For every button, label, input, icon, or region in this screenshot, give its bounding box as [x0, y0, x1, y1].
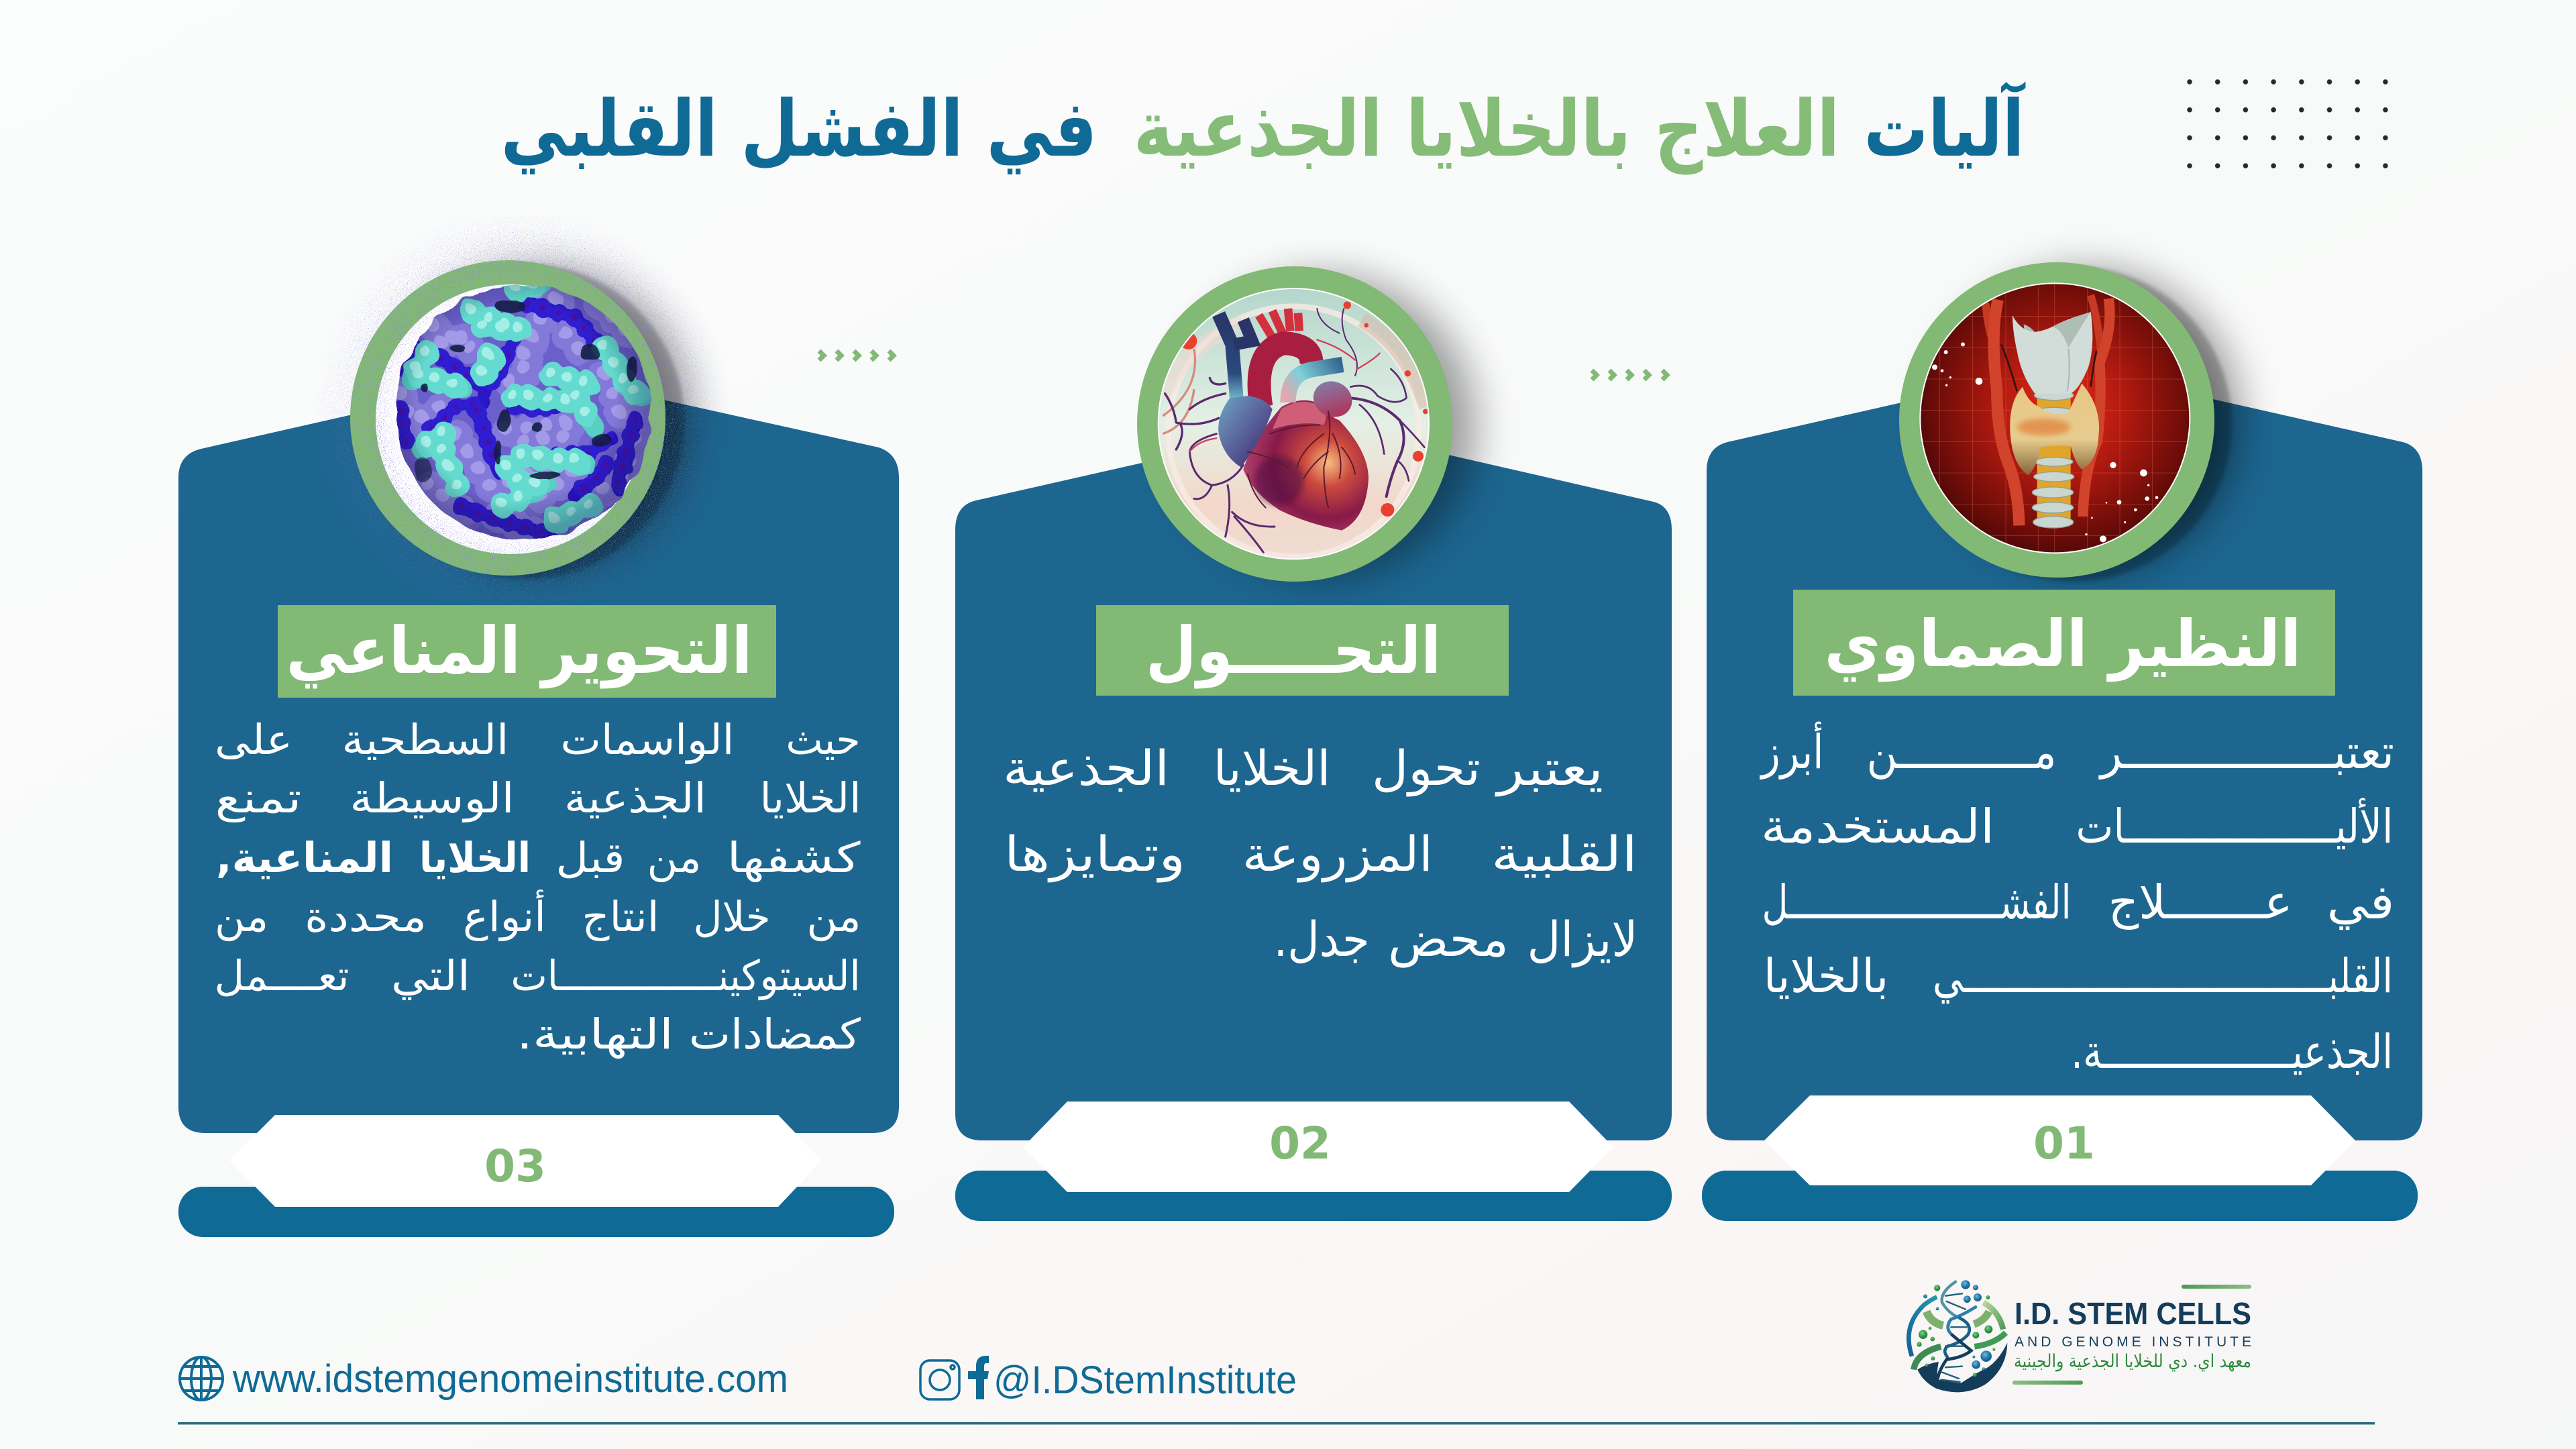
body text 03: أنواع — [463, 890, 546, 941]
body text 03: التهابية. — [517, 1010, 674, 1059]
icon: instagram — [920, 1360, 959, 1399]
body text 03: قبل — [555, 833, 625, 882]
body text 02: لايزال — [1527, 911, 1638, 968]
body text 03: الخلايا — [419, 833, 531, 882]
image circle: immune cell — [315, 215, 731, 631]
heading 03: التحوير المناعي — [286, 613, 753, 689]
body text 03: التي — [391, 951, 470, 1000]
number tab 03 — [229, 1115, 822, 1207]
title: في الفشل القلبي — [500, 84, 1097, 174]
card background 02 — [955, 424, 1672, 1140]
body text 01: القلبـــــــــــــــــــــــــــــــــي — [1933, 949, 2393, 1004]
body text 03: من — [215, 892, 268, 941]
arrows 03 — [819, 351, 894, 360]
body text 02 — [1003, 740, 1638, 968]
body text 03: كشفها — [727, 833, 861, 883]
body text 03: الخلايا — [759, 773, 861, 822]
coronaries — [1248, 411, 1355, 508]
body text 02: تحول — [1372, 740, 1481, 797]
logo — [1909, 1280, 2251, 1392]
title — [500, 81, 2026, 174]
icon: globe — [180, 1357, 223, 1400]
arteries — [1986, 295, 2110, 525]
body text 03: حيث — [786, 715, 860, 764]
footer: website: www.idstemgenomeinstitute.com — [232, 1357, 788, 1401]
body text 03: السطحية — [342, 715, 508, 764]
heading 02 — [1096, 605, 1509, 696]
logo: AND GENOME INSTITUTE — [2015, 1334, 2251, 1350]
image circle: heart — [1137, 266, 1476, 582]
body text 03 — [215, 715, 861, 1059]
body text 02: محض — [1388, 911, 1509, 968]
body text 01: تعتبــــــــــــــــر — [2098, 724, 2394, 780]
number tab 02 — [1023, 1102, 1613, 1192]
sparkles — [1932, 342, 2158, 542]
body text 03: الجذعية — [564, 773, 706, 822]
body text 03: على — [215, 715, 292, 764]
body text 03: كمضادات — [689, 1010, 861, 1059]
body text 03: المناعية, — [216, 833, 393, 882]
body text 03: تمنع — [215, 773, 302, 822]
arrows 02 — [1592, 370, 1667, 380]
card background 01 — [1707, 366, 2422, 1140]
body text 03: من — [806, 892, 861, 941]
body text 03: الواسمات — [561, 715, 734, 764]
heading 01: النظير الصماوي — [1825, 606, 2301, 682]
great vessels — [1219, 309, 1311, 407]
body text 03: الوسيطة — [350, 773, 514, 822]
emblem — [1909, 1280, 2007, 1392]
icon: facebook — [968, 1356, 989, 1399]
body text 01: المستخدمة — [1761, 799, 1994, 854]
bottom bar 02 — [955, 1171, 1672, 1221]
body text 01: الفشــــــــــــــــــــل — [1762, 875, 2072, 930]
ventricles — [1243, 400, 1368, 531]
body text 02: الخلايا — [1213, 740, 1331, 796]
brand text: I.D. STEM CELLS — [2015, 1296, 2251, 1331]
cartilage — [2024, 312, 2091, 349]
panel: 01 paracrine — [1702, 262, 2422, 1221]
dot grid decoration — [2176, 68, 2400, 180]
body text 01: أبرز — [1760, 721, 1823, 780]
veins — [1165, 309, 1424, 552]
body text 02: وتمايزها — [1004, 826, 1185, 883]
body text 02: الجذعية — [1003, 740, 1169, 796]
body text 01: في — [2326, 875, 2395, 930]
number tab 03: 03 — [484, 1140, 546, 1192]
bottom bar 03 — [178, 1187, 894, 1237]
body text 03: السيتوكينــــــــــــــات — [511, 951, 860, 1000]
card background 03 — [178, 372, 899, 1133]
heading 01 — [1793, 590, 2335, 696]
body text 01: بالخلايا — [1763, 949, 1889, 1004]
number tab 02: 02 — [1269, 1118, 1331, 1169]
panel: 02 differentiation — [955, 266, 1672, 1221]
number tab 01: 01 — [2033, 1118, 2095, 1169]
heading 02: التحـــــول — [1146, 613, 1441, 689]
panel: 03 immune modulation — [178, 215, 899, 1237]
body text 03: محددة — [305, 892, 427, 941]
body text 03: انتاج — [582, 892, 659, 941]
body text 03: من — [647, 833, 702, 882]
body text 01: الأليــــــــــــــــــات — [2076, 798, 2394, 854]
logo: معهد اي. دي للخلايا الجذعية والجينية — [2014, 1351, 2251, 1372]
body text 01: الجذعيـــــــــــــــــة. — [2071, 1024, 2393, 1079]
title: آليات — [1864, 81, 2026, 174]
body text 01: مـــــــــــن — [1866, 724, 2057, 780]
footer: social handle: @I.DStemInstitute — [994, 1358, 1297, 1402]
title: العلاج بالخلايا الجذعية — [1134, 84, 1839, 174]
body text 03: خلال — [694, 892, 770, 941]
body text 03: تعــــمل — [215, 951, 349, 1000]
thyroid gland — [2010, 384, 2099, 475]
body text 02: المزروعة — [1242, 826, 1433, 883]
body text 01: عـــــــلاج — [2108, 875, 2293, 930]
body text 02: يعتبر — [1495, 740, 1603, 797]
body text 01 — [1760, 721, 2395, 1079]
body text 02: القلبية — [1491, 826, 1638, 882]
image circle: thyroid — [1899, 262, 2239, 582]
body text 02: جدل. — [1273, 911, 1370, 967]
bottom bar 01 — [1702, 1171, 2418, 1221]
trachea — [2037, 394, 2071, 521]
number tab 01 — [1764, 1095, 2355, 1185]
